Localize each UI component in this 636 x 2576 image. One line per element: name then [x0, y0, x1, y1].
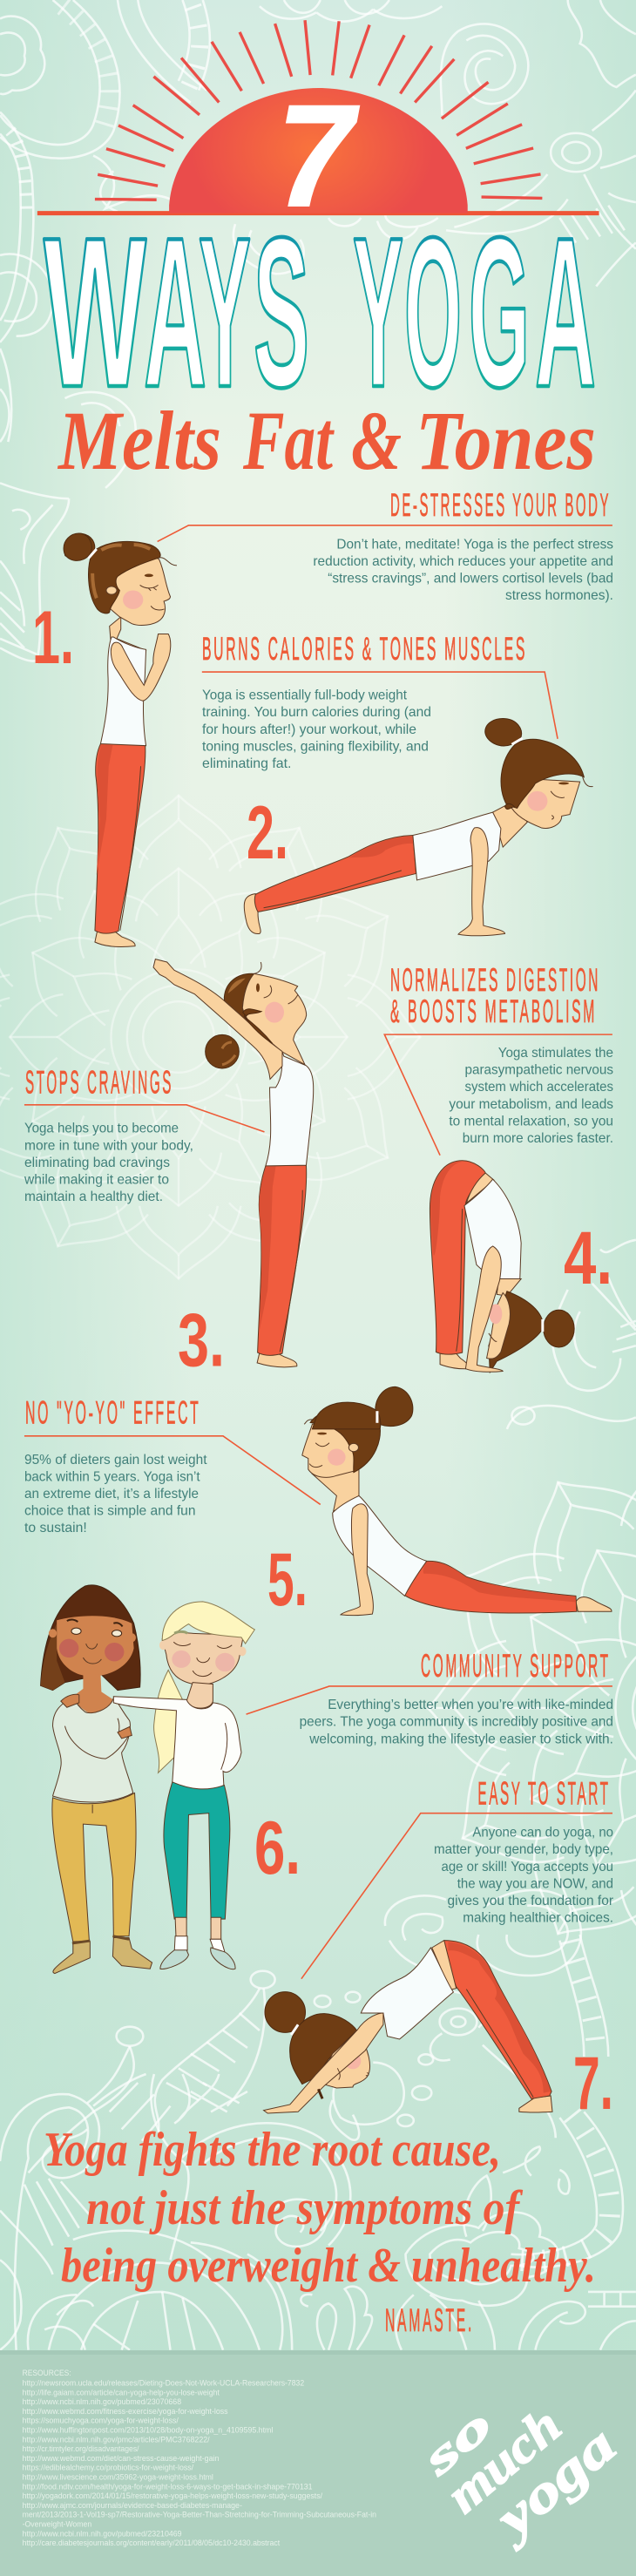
section 1: de-stresses your body [32, 486, 613, 946]
body text: eliminating bad cravings [24, 1156, 170, 1170]
body text: age or skill! Yoga accepts you [441, 1860, 613, 1874]
body text: gives you the foundation for [448, 1894, 613, 1908]
body text: parasympathetic nervous [465, 1063, 613, 1077]
title: ways yoga: O [404, 193, 462, 431]
title: ways yoga: Y [199, 193, 251, 431]
logo: so much yoga: much [436, 2396, 572, 2524]
body text: more in tune with your body, [24, 1138, 193, 1153]
body text [434, 1825, 613, 1926]
resources list: http://www.livescience.com/35962-yoga-weight-loss.html [23, 2473, 213, 2482]
body text [300, 1698, 613, 1746]
body text: the way you are NOW, and [457, 1876, 613, 1891]
body text: 95% of dieters gain lost weight [24, 1453, 207, 1468]
resources list: -Overweight-Women [23, 2520, 91, 2529]
body text: welcoming, making the lifestyle easier to stick with. [308, 1732, 613, 1746]
title: ways yoga: Y [353, 193, 403, 431]
body text: while making it easier to [24, 1173, 169, 1188]
body text: peers. The yoga community is incredibly positive and [300, 1715, 613, 1730]
closing quote: Yoga fights the root cause, [44, 2123, 501, 2177]
resources list [23, 2369, 376, 2547]
section 2: burns calories and tones muscles [202, 630, 593, 936]
title: ways yoga: G [469, 193, 530, 431]
body text: your metabolism, and leads [449, 1097, 613, 1112]
resources list: http://newsroom.ucla.edu/releases/Dieting-Does-Not-Work-UCLA-Researchers-7832 [23, 2379, 304, 2388]
leader line [24, 1436, 321, 1504]
leader line [202, 672, 558, 739]
resources list: RESOURCES: [23, 2369, 71, 2377]
logo: so much yoga: so [413, 2400, 502, 2485]
resources list: https://ediblealchemy.co/probiotics-for-weight-loss/ [23, 2464, 194, 2472]
body text: an extreme diet, it’s a lifestyle [24, 1487, 199, 1502]
logo: so much yoga [413, 2396, 626, 2552]
subtitle: melts fat and tones: Tones [416, 394, 596, 487]
body text [24, 1453, 207, 1535]
number 7: 7. [573, 2042, 613, 2125]
body text: Don’t hate, meditate! Yoga is the perfect stress [336, 537, 613, 552]
footer band [0, 2350, 636, 2576]
leader line [24, 1105, 265, 1132]
resources list: http://food.ndtv.com/health/yoga-for-weight-loss-6-ways-to-get-back-in-shape-770131 [23, 2482, 313, 2491]
body text: matter your gender, body type, [434, 1842, 613, 1857]
body text: for hours after!) your workout, while [202, 722, 416, 737]
body text: system which accelerates [465, 1080, 613, 1095]
body text: Yoga helps you to become [24, 1122, 179, 1136]
figure: standing prayer pose [64, 533, 177, 946]
body text: Yoga is essentially full-body weight [202, 688, 408, 702]
body text: to sustain! [24, 1521, 87, 1535]
body text: eliminating fat. [202, 756, 291, 771]
subtitle: melts fat and tones: Fat [242, 394, 335, 487]
section 3: stops cravings [24, 959, 314, 1382]
body text: toning muscles, gaining flexibility, and [202, 739, 429, 754]
title: ways yoga: A [144, 193, 206, 431]
number seven: 7 [277, 76, 359, 237]
body text: to mental relaxation, so you [449, 1114, 613, 1129]
body text [313, 537, 613, 603]
body text: training. You burn calories during (and [202, 705, 431, 720]
body text: choice that is simple and fun [24, 1504, 195, 1519]
resources list: http://www.ncbi.nlm.nih.gov/pubmed/23210469 [23, 2529, 182, 2538]
number 5: 5. [267, 1538, 308, 1622]
resources list: http://care.diabetesjournals.org/content/early/2011/08/05/dc10-2430.abstract [23, 2539, 281, 2547]
body text: burn more calories faster. [463, 1131, 613, 1146]
sun header [37, 20, 599, 237]
body text: maintain a healthy diet. [24, 1190, 163, 1204]
body text: Anyone can do yoga, no [472, 1825, 613, 1840]
figure: downward dog pose [264, 1941, 552, 2113]
resources list: http://life.gaiam.com/article/can-yoga-help-you-lose-weight [23, 2388, 220, 2396]
section 5: no yo-yo effect: NO "YO-YO" EFFECT [25, 1394, 200, 1431]
body text: “stress cravings”, and lowers cortisol levels (bad [328, 572, 613, 586]
figure: upward dog pose [302, 1408, 612, 1616]
resources list: http://www.huffingtonpost.com/2013/10/28/body-on-yoga_n_4109595.html [23, 2426, 273, 2435]
logo: so much yoga: yoga [480, 2416, 626, 2552]
number 4: 4. [564, 1217, 612, 1300]
number 3: 3. [178, 1298, 225, 1382]
closing quote [44, 2123, 596, 2293]
subtitle: melts fat and tones: Melts [57, 394, 221, 487]
section 4: normalizes digestion and boosts metabolism [384, 961, 613, 1373]
title: ways yoga: W [44, 193, 146, 431]
figure: plank pose [244, 719, 593, 936]
body text [202, 688, 431, 771]
infographic canvas: NAMASTE. [385, 2301, 474, 2338]
resources list: http://www.webmd.com/diet/can-stress-cause-weight-gain [23, 2454, 219, 2463]
body text: back within 5 years. Yoga isn’t [24, 1469, 200, 1484]
sun rays [95, 20, 542, 200]
number 1: 1. [32, 596, 74, 680]
figure: forward fold pose [430, 1161, 574, 1373]
number 2: 2. [247, 791, 288, 875]
section 3: stops cravings: STOPS CRAVINGS [25, 1063, 173, 1100]
resources list: http://www.ajmc.com/journals/evidence-based-diabetes-manage- [23, 2501, 242, 2510]
figure: raised arms pose [153, 959, 314, 1367]
section 7: easy to start [264, 1775, 613, 2125]
body text: stress hormones). [505, 588, 613, 603]
section 6: community support [41, 1585, 613, 1974]
resources list: http://cr.timtyler.org/disadvantages/ [23, 2444, 139, 2453]
resources list: http://yogadork.com/2014/01/15/restorative-yoga-helps-weight-loss-new-study-suggests/ [23, 2491, 323, 2500]
friend with brown hair [41, 1585, 152, 1974]
figure: two friends [41, 1585, 254, 1974]
closing quote: not just the symptoms of [86, 2181, 524, 2235]
resources list: http://www.ncbi.nlm.nih.gov/pmc/articles/PMC3768222/ [23, 2435, 210, 2444]
body text: reduction activity, which reduces your appetite and [313, 554, 613, 569]
body text [24, 1122, 193, 1204]
body text [449, 1046, 613, 1146]
head and raised arm [153, 959, 307, 1079]
body text: making healthier choices. [463, 1910, 613, 1926]
subtitle: melts fat and tones: & [351, 394, 402, 487]
leader line [247, 1686, 612, 1714]
friend with blond hair [61, 1602, 254, 1969]
resources list: https://somuchyoga.com/yoga-for-weight-loss/ [23, 2417, 179, 2425]
figure: hair bun of upward dog pose [312, 1386, 413, 1429]
leader line [384, 1034, 612, 1156]
title: ways yoga: S [254, 193, 309, 431]
resources list: ment/2013/2013-1-Vol19-sp7/Restorative-Yoga-Better-Than-Stretching-for-Trimming-Subcutaneous-Fat-in [23, 2511, 376, 2519]
legs and shirt [257, 1046, 314, 1367]
number 6: 6. [254, 1807, 301, 1890]
leader line [158, 525, 612, 541]
section 5: no yo-yo effect [24, 1386, 612, 1622]
leader line [301, 1813, 612, 1979]
body text: Everything’s better when you’re with like-minded [328, 1698, 613, 1712]
resources list: http://www.webmd.com/fitness-exercise/yoga-for-weight-loss [23, 2407, 228, 2416]
sun dome with horizon [37, 88, 599, 215]
resources list: http://www.ncbi.nlm.nih.gov/pubmed/23070668 [23, 2397, 181, 2406]
body text: Yoga stimulates the [498, 1046, 613, 1061]
